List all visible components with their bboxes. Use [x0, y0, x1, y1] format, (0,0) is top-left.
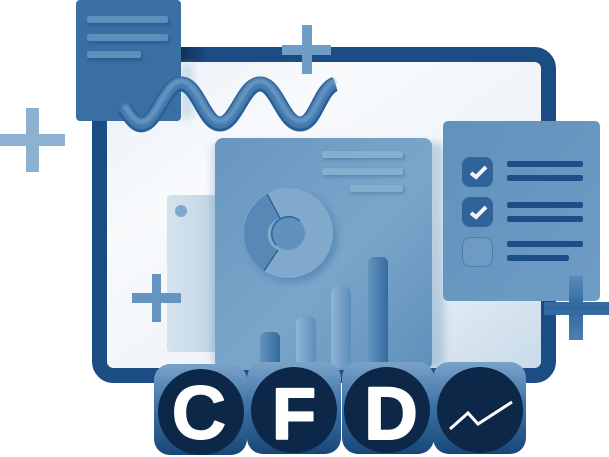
die: C — [154, 364, 247, 456]
text lines — [322, 151, 405, 194]
icon: plus lower left — [132, 274, 181, 322]
die: F: F — [272, 375, 316, 455]
die: D — [342, 362, 434, 455]
die: C: C — [172, 371, 226, 456]
checkbox checked — [462, 197, 493, 227]
die: D: D — [364, 372, 418, 455]
icon: plus top — [282, 25, 331, 74]
checkbox checked — [462, 157, 493, 187]
panel: screen frame — [100, 47, 548, 376]
die: trend line — [433, 362, 526, 454]
panel: main report document — [212, 138, 444, 370]
bar chart — [260, 257, 388, 368]
panel: faded back document — [167, 195, 227, 352]
icon: pin — [175, 205, 187, 217]
note lines — [87, 16, 170, 61]
icon: plus right — [544, 276, 609, 340]
icon: plus left — [0, 108, 65, 172]
checklist lines — [507, 161, 583, 261]
wave line — [124, 81, 335, 125]
donut chart — [243, 188, 337, 282]
panel: top-left note document — [76, 0, 181, 121]
die: F — [247, 362, 341, 455]
panel: checklist document — [443, 121, 600, 301]
checkbox empty — [462, 238, 492, 266]
